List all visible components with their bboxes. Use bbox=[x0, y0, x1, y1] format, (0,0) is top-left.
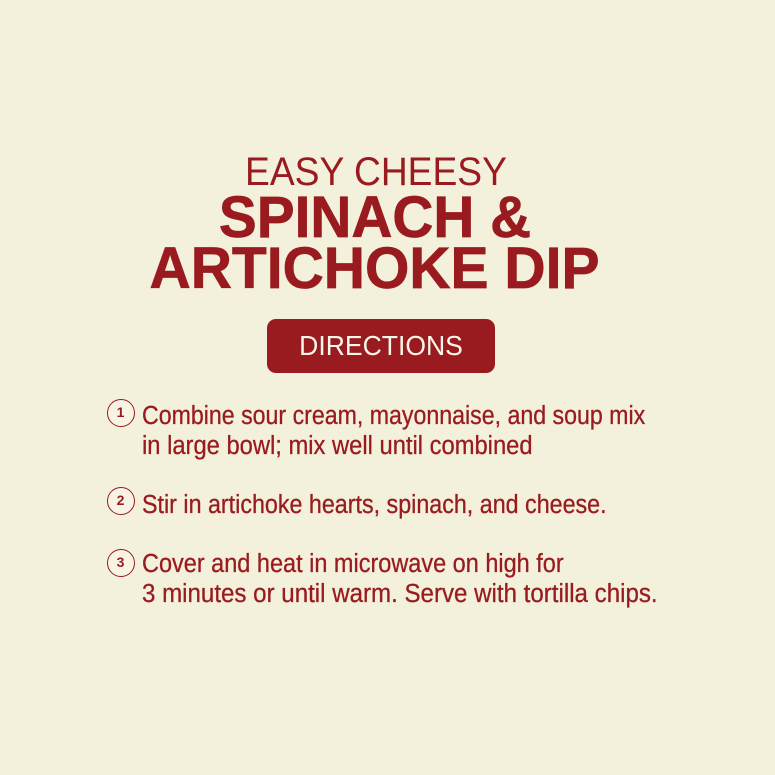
step 1 text bbox=[142, 402, 646, 460]
step 3 text: Cover and heat in microwave on high for bbox=[142, 550, 564, 578]
step 3 number bbox=[107, 549, 135, 577]
step 2 number bbox=[107, 487, 135, 515]
directions badge bbox=[267, 319, 495, 373]
step 1 bbox=[107, 399, 646, 460]
step 3 bbox=[107, 549, 658, 608]
step 2 text: Stir in artichoke hearts, spinach, and cheese. bbox=[142, 491, 607, 519]
step 1 number: 1 bbox=[117, 404, 124, 420]
directions label: DIRECTIONS bbox=[299, 330, 463, 361]
step 2 number: 2 bbox=[117, 492, 124, 508]
step 2 bbox=[107, 487, 607, 519]
title line: artichoke dip: ARTICHOKE DIP bbox=[150, 236, 599, 300]
step 3 text bbox=[142, 550, 658, 608]
step 3 number: 3 bbox=[117, 554, 124, 570]
title line: easy cheesy: EASY CHEESY bbox=[245, 150, 507, 194]
step 1 number bbox=[107, 399, 135, 427]
step 1 text: in large bowl; mix well until combined bbox=[142, 432, 533, 460]
step 1 text: Combine sour cream, mayonnaise, and soup mix bbox=[142, 402, 645, 430]
step 3 text: 3 minutes or until warm. Serve with tortilla chips. bbox=[142, 580, 658, 608]
title bbox=[150, 150, 599, 300]
title line: spinach: SPINACH & bbox=[219, 184, 531, 250]
